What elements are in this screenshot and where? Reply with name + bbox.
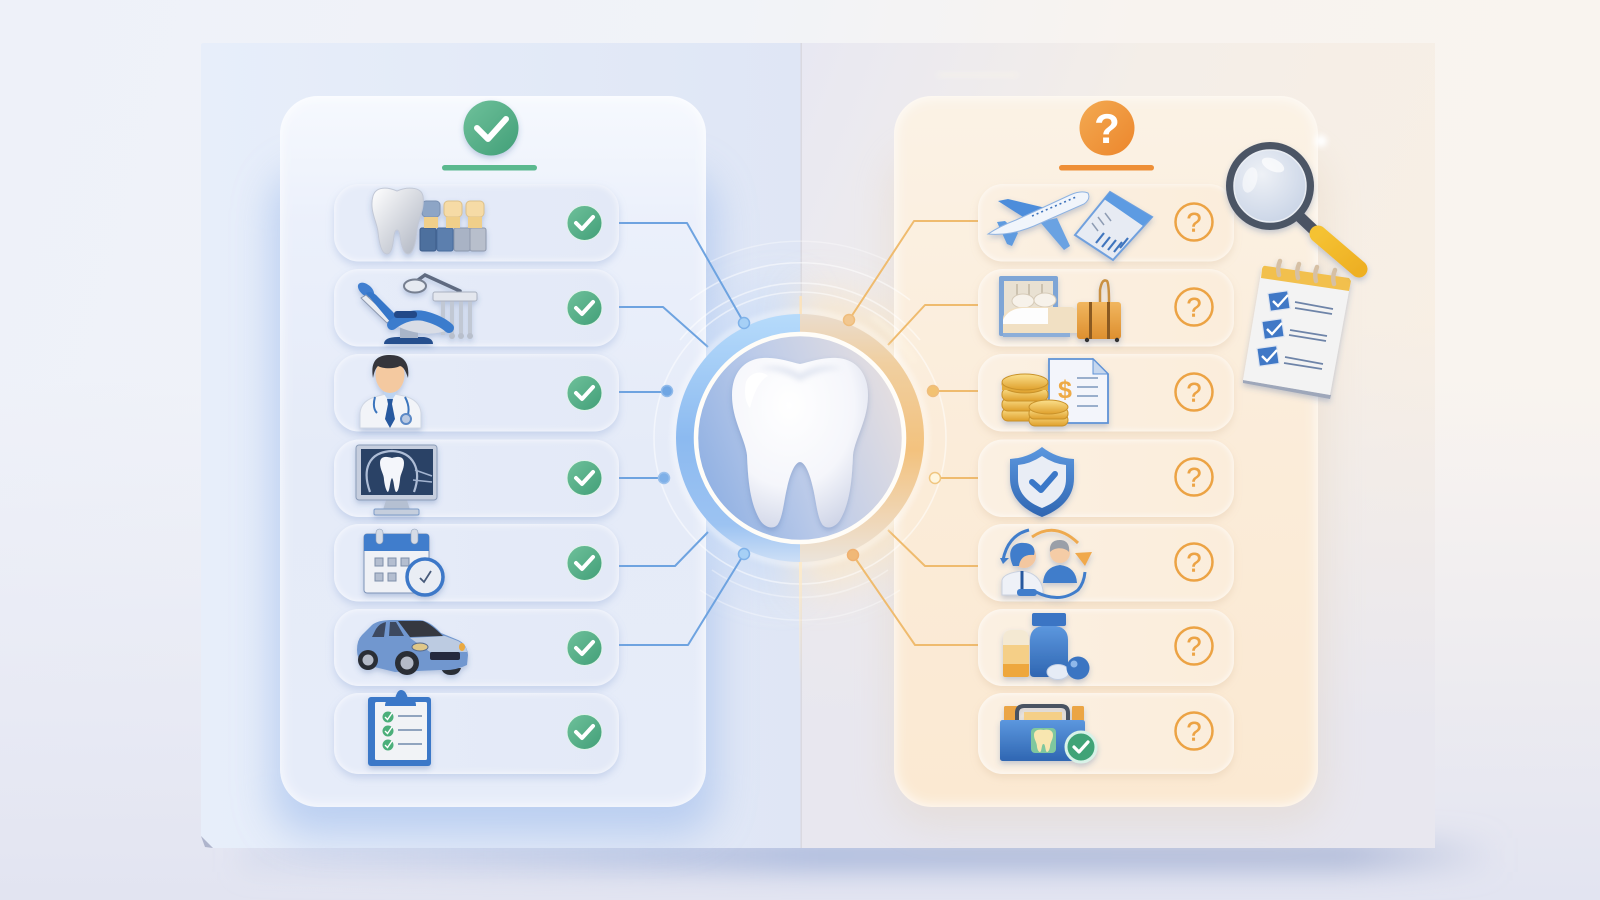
- icon: coins and invoice: $: [1058, 376, 1072, 404]
- icon: dentist portrait: [360, 355, 421, 428]
- open book panel: [201, 43, 1435, 848]
- status check: [567, 290, 602, 326]
- right header question icon: ?: [1094, 105, 1120, 152]
- ring glow: [674, 312, 926, 564]
- panel: right unknown list: [894, 96, 1318, 807]
- spine line: [800, 43, 802, 848]
- status question: [1176, 204, 1212, 240]
- status check: [567, 376, 602, 410]
- status check: [567, 206, 602, 240]
- status question: ?: [1186, 548, 1202, 578]
- icon: airplane and ticket: [988, 192, 1152, 260]
- status check: [567, 714, 602, 750]
- icon: protection shield: [1010, 447, 1074, 517]
- status question: ?: [1186, 208, 1202, 238]
- row R4: insurance: [978, 440, 1234, 517]
- status question: ?: [1186, 632, 1202, 662]
- row R6: medication: [978, 609, 1234, 686]
- icon: hotel bed and suitcase: [999, 276, 1121, 342]
- connectors: right: [849, 221, 978, 645]
- outer ring right half: [800, 314, 924, 562]
- icon: clipboard checklist: [368, 690, 431, 766]
- left header underline: [442, 165, 537, 170]
- status check: [567, 630, 602, 666]
- status question: ?: [1186, 292, 1202, 322]
- inner disc: [696, 334, 904, 542]
- status question: [1176, 288, 1212, 326]
- status question: [1176, 544, 1212, 580]
- connector nodes: [658, 314, 940, 560]
- icon: dentist and patient with arrows: [1000, 530, 1092, 598]
- right list rows: [978, 184, 1234, 774]
- status question: [1176, 628, 1212, 664]
- row R5: consultation: [978, 524, 1234, 602]
- right header question icon: [1080, 100, 1134, 156]
- row L2: dental chair: [334, 269, 619, 346]
- icon: tooth with crown shade samples: [372, 188, 486, 254]
- left page: [201, 43, 801, 848]
- status check: [567, 546, 602, 580]
- row L4: x-ray: [334, 440, 619, 517]
- status question: ?: [1186, 716, 1202, 746]
- row R2: lodging: [978, 269, 1234, 346]
- connector rings around the center: [654, 241, 946, 620]
- status check: [567, 460, 602, 496]
- panel glows: [272, 150, 1326, 835]
- status question: [1176, 374, 1212, 410]
- sparkle on panel corner: [1315, 135, 1327, 147]
- central tooth: [732, 358, 868, 527]
- row L5: calendar: [334, 524, 619, 602]
- row L1: tooth and crown materials: [334, 184, 619, 262]
- status question: ?: [1186, 462, 1202, 492]
- connectors: left: [619, 223, 744, 645]
- center soft glow: [650, 290, 950, 590]
- row R7: emergency kit: [978, 693, 1234, 774]
- icon: medicine bottles and pills: [1003, 613, 1090, 680]
- icon: dental kit with check badge: [1000, 706, 1096, 762]
- row R1: flights: [978, 184, 1234, 262]
- outer ring left half: [676, 314, 800, 562]
- row L7: checklist: [334, 690, 619, 774]
- icon: coins and invoice: [1002, 359, 1108, 426]
- row L6: car: [334, 609, 619, 686]
- notepad checklist: [1243, 261, 1351, 399]
- icon: blue car: [357, 620, 468, 675]
- left header check icon: [464, 100, 518, 156]
- row L3: dentist: [334, 354, 619, 432]
- status question: ?: [1186, 378, 1202, 408]
- folded corner: [201, 836, 213, 848]
- tooth highlight: [745, 373, 768, 408]
- icon: calendar and clock: [364, 529, 443, 595]
- icon: x-ray monitor: [356, 445, 437, 515]
- status question: [1176, 712, 1212, 750]
- left list rows: [334, 184, 619, 774]
- page glint: [938, 74, 1018, 76]
- row R3: costs: [978, 354, 1234, 432]
- center tooth medallion: [674, 312, 926, 564]
- icon: dental chair and instruments: [355, 275, 477, 344]
- right page: [801, 43, 1435, 848]
- spine glow: [799, 296, 802, 682]
- magnifying glass: [1230, 146, 1359, 269]
- right header underline: [1059, 165, 1154, 170]
- status question: [1176, 458, 1212, 496]
- tooth valley shading: [757, 366, 843, 381]
- panel: left confirmed list: [280, 96, 706, 807]
